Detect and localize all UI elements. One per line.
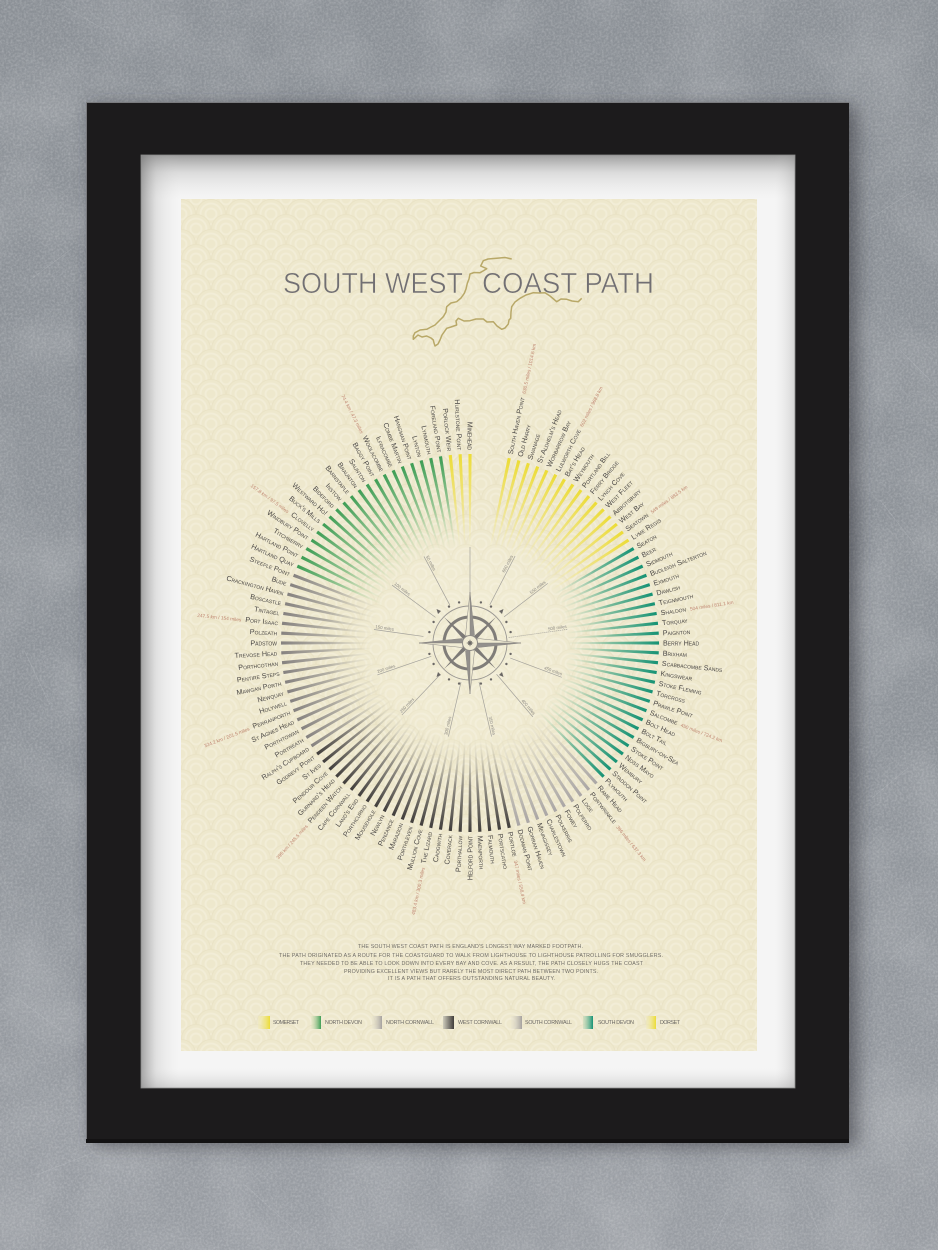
place names: Dorset: Worbarrow Bay [544,419,573,469]
place names: South Devon: Plymouth [603,776,630,803]
place names: Dorset: West Fleet [603,478,635,510]
bars: South Devon [537,547,659,778]
description paragraph: THEY NEEDED TO BE ABLE TO LOOK DOWN INTO EVERY BAY AND COVE. AS A RESULT, THE PATH CLOSELY HUGS THE COAST [300,961,644,967]
place names: North Cornwall: St Agnes Head [250,717,296,744]
place names: South Devon: Sidmouth [644,549,674,569]
place names: Dorset: Ferry Bridge [588,458,621,496]
compass dots [428,601,512,685]
place names: North Cornwall: Boscastle [249,592,283,607]
place names: West Cornwall: Maenporth [476,835,486,870]
place names: North Cornwall: 324.2 km / 201.5 milesPerranporth [202,708,292,749]
place names: West Cornwall: Cadgwith [431,833,444,863]
place names: Somerset: Porlock Weir [441,408,454,452]
place names: Dorset: Abbotsbury [610,486,643,517]
place names: West Cornwall: St Ives [300,761,323,782]
bars: North Devon [297,456,457,605]
mileage spokes: 300 miles [443,715,453,735]
place names: North Cornwall: Padstow [250,638,277,648]
legend: North Cornwall [372,1016,434,1029]
place names: Dorset: West Bay [617,499,646,525]
place names: Dorset [506,343,689,542]
place names: South Devon: Bolt Head [644,717,677,739]
place names: Dorset: Swanage [525,432,542,461]
radial chart of coast path places [197,343,734,915]
description paragraph: PROVIDING EXCELLENT VIEWS BUT RARELY THE MOST DIRECT PATH BETWEEN TWO POINTS. [344,969,598,975]
mileage spokes: 100 miles [393,581,412,597]
region: North Cornwall [197,554,390,782]
place names: West Cornwall: Coverack [442,834,454,865]
place names: South Devon: Seaton [635,532,658,550]
place names: South Cornwall: Fowey [563,808,581,830]
place names: North Devon: Titchberry [272,526,306,551]
title: COAST PATH [482,268,654,300]
title [283,268,654,300]
place names: North Cornwall: Bude [270,574,288,588]
mileage spokes: 400 miles [520,698,537,716]
place names: Dorset: Bat's Head [563,445,587,478]
place names: North Devon: Lynton [410,435,424,458]
place names: South Devon: Bigbury-on-Sea [635,736,681,768]
place names: North Cornwall: Trevose Head [234,649,278,660]
legend: Somerset: SOMERSET [273,1020,300,1026]
place names: South Cornwall: Dodman Point [516,828,535,872]
mileage spokes: 550 miles [529,579,547,595]
legend: Somerset [258,1016,300,1029]
place names: Dorset: St Aldhelm's Head [535,408,564,464]
mileage spokes: 600 miles [501,554,515,573]
region: West Cornwall [273,698,530,915]
legend: North Devon: NORTH DEVON [325,1020,362,1026]
place names: North Devon: Buck's Mills [287,494,323,525]
mileage spokes: 450 miles [543,665,564,677]
map: coast path outline [413,258,582,346]
description paragraph: THE PATH ORIGINATED AS A ROUTE FOR THE COASTGUARD TO WALK FROM LIGHTHOUSE TO LIGHTHOUSE PATROLLING FOR SMUGGLERS. [279,953,663,959]
place names: North Devon: Hartland Point [254,530,300,559]
legend: Dorset: DORSET [660,1020,681,1026]
mileage spokes: 200 miles [376,663,397,674]
place names: South Devon: Staddon Point [610,769,649,805]
place names: North Cornwall: Pentire Steps [236,669,281,684]
place names: Dorset: Old Harry [516,423,533,458]
place names: North Devon: Hartland Quay [250,542,296,569]
place names: Somerset: Hurlstone Point [453,399,464,451]
white mat [141,155,795,1088]
place names: North Devon: Saunton [347,457,369,484]
compass diagonal points [442,615,498,671]
mileage spokes: 500 miles [548,624,568,631]
place names: North Devon: Braunton [336,460,360,490]
legend: North Devon [311,1016,362,1029]
place names: South Devon: Salcombe450 miles / 724.2 km [649,708,724,744]
place names: West Cornwall: 483.4 km / 300.3 milesThe Lizard [408,830,434,915]
compass main points [419,592,521,694]
place names: West Cornwall: Land's End [333,796,360,829]
place names: North Devon: 157.8 km / 97.5 milesClovelly [249,481,317,534]
centre glow [350,523,590,763]
place names: South Devon [603,532,734,805]
place names: West Cornwall: Newlyn [368,813,387,837]
compass rings [433,606,507,680]
place names: North Cornwall: 247.5 km / 154 miles Port Isaac [197,610,279,627]
place names: North Cornwall: Crackington Haven [226,573,285,597]
place names: South Cornwall [516,783,649,872]
place names: North Devon: Hangman Point [392,414,415,461]
place names: North Devon: Bideford [311,484,337,510]
place names: West Cornwall: Mullion Cove [405,828,425,871]
place names: South Cornwall: Rame Head [596,783,625,815]
place names: North Cornwall: Holywell [258,698,288,716]
mileage spokes: 150 miles [375,624,395,632]
place names: South Cornwall: Charlestown [544,817,569,858]
place names: South Devon: Prawle Point [652,698,694,720]
place names: South Devon: Exmouth [652,571,680,588]
place names: North Devon: Foreland Point [428,405,444,453]
frame drop shadow [92,106,857,1146]
place names: South Devon: Wembury [617,761,645,786]
place names: South Cornwall: Gorran Haven [525,825,548,870]
place names: North Devon: Westward Ho! [290,481,330,517]
region: Somerset [441,399,474,548]
place names: North Cornwall: Porthtowan [263,726,300,752]
poster with scale pattern [181,199,757,1051]
legend: South Cornwall: SOUTH CORNWALL [525,1020,572,1026]
legend: West Cornwall: WEST CORNWALL [458,1020,502,1026]
place names: South Devon: Paignton [662,627,691,637]
place names: South Devon: Beer [640,544,658,559]
region: North Devon [249,392,457,605]
place names: South Devon: Dawlish [655,582,681,597]
legend: South Devon: SOUTH DEVON [598,1020,634,1026]
place names: South Devon: Brixham [662,649,687,659]
place names: West Cornwall: Helford Point [466,836,474,880]
legend: Dorset [646,1016,681,1029]
place names: West Cornwall: Falmouth [486,834,498,864]
description paragraph [279,944,663,982]
place names: West Cornwall: Penzance [376,817,396,847]
place names: Dorset: Portland Bill [580,450,612,490]
bars: South Cornwall [493,713,598,826]
place names: North Cornwall: Mawgan Porth [236,679,283,697]
place names: South Devon: Kingswear [660,669,693,683]
place names: West Cornwall: Porthcurno [341,802,369,839]
mileage spokes: 50 miles [425,555,437,572]
compass rose [419,592,521,694]
mileage spokes: 350 miles [488,716,497,736]
compass hub [462,636,478,650]
place names: North Cornwall: Porthcothan [238,659,279,672]
place names: North Cornwall: Polzeath [250,627,278,637]
place names: West Cornwall: Cape Cornwall [316,790,352,832]
legend: South Cornwall [511,1016,572,1029]
place names: North Devon: Combe Martin [381,421,405,465]
place names: West Cornwall: Porthleven [395,825,415,861]
bars: West Cornwall [316,698,511,832]
mileage spokes: 250 miles [399,696,416,714]
place names: Dorset: Weymouth [571,452,596,484]
place names: South Cornwall: Mevagissey [535,822,556,857]
place names: South Devon: Scabbacombe Sands [661,659,724,674]
place names: North Cornwall: Portreath [273,735,305,759]
place names: North Cornwall [197,554,311,782]
region: Dorset [488,343,689,592]
legend [258,1016,681,1029]
region: South Cornwall [493,713,649,872]
region: South Devon [537,532,734,805]
place names: West Cornwall: Porthallow [454,835,464,872]
place names: South Cornwall: Polperro [571,802,595,832]
place names: South Devon: Torcross [655,689,687,705]
black picture frame [86,102,849,1143]
bars: Dorset [488,458,629,592]
place names: Somerset [441,399,474,452]
place names: West Cornwall: 395 km / 245.5 milesPendeen Watch [273,783,344,861]
place names: West Cornwall: Mousehole [353,807,378,842]
place names: West Cornwall: Portscatho [496,833,510,870]
place names: South Devon: Stoke Point [629,744,665,772]
place names: South Devon: Shaldon 504 miles / 811.1 km [660,597,734,617]
place names: South Devon: Budleigh Salterton [649,548,708,578]
place names: Dorset: Lulworth Cove602 miles / 968.8 km [554,385,605,473]
place names: North Cornwall: Newquay [256,688,285,704]
place names: Somerset: Minehead [466,422,474,450]
place names: North Devon [249,392,444,569]
place names: Dorset: South Haven Point630.5 miles / 1014.6 km [506,343,538,455]
place names: West Cornwall: Godrevy Point [274,753,317,787]
place names: South Cornwall: Portwrinkle 396 miles / 637.3 km [588,790,649,863]
place names: North Devon: Barnstaple [324,464,352,496]
legend: North Cornwall: NORTH CORNWALL [386,1020,434,1026]
place names: Dorset: Seatown549 miles / 883.5 km [623,482,689,533]
place names: West Cornwall: Marazion [387,821,405,851]
place names: South Cornwall: Looe [580,796,596,815]
place names: North Devon: Ilfracombe [374,435,396,469]
description paragraph: THE SOUTH WEST COAST PATH IS ENGLAND'S LONGEST WAY MARKED FOOTPATH. [358,944,583,950]
place names: North Cornwall: Ralph's Cupboard [260,744,311,782]
description paragraph: IT IS A PATH THAT OFFERS OUTSTANDING NATURAL BEAUTY. [388,976,555,982]
legend: South Devon [583,1016,634,1029]
place names: South Cornwall: Polkerris [554,813,576,844]
place names: North Devon: Instow [324,481,344,503]
place names: North Devon: Lynmouth [419,425,434,456]
place names: North Cornwall: Steeple Point [248,554,291,578]
place names: Dorset: Lynch Cove [596,469,627,503]
place names: West Cornwall: Portloe 347 miles / 558.4 km [506,831,530,905]
place names: West Cornwall: Pendour Cove [291,768,330,805]
place names: North Devon: Windbury Point [265,508,311,542]
place names: North Devon: Baggy Point [351,441,377,478]
place names: West Cornwall [273,753,530,915]
bars: Somerset [449,454,472,548]
place names: South Devon: Torquay [661,616,689,627]
place names: South Devon: Stoke Fleming [658,679,703,697]
legend: West Cornwall [443,1016,502,1029]
place names: North Cornwall: Tintagel [254,604,280,617]
place names: West Cornwall: Gurnard's Head [296,776,337,817]
place names: South Devon: Teignmouth [658,591,694,607]
bars: North Cornwall [281,574,390,747]
place names: North Devon: 74.4 km / 47.3 miles Woolacombe [339,392,387,474]
place names: South Devon: Noss Mayo [623,753,656,780]
place names: South Devon: Berry Head [663,638,699,648]
place names: South Devon: Bolt Tail [640,727,669,747]
place names: Dorset: Lyme Regis [629,515,663,542]
title: SOUTH WEST [283,268,463,300]
mileage spokes [374,547,568,737]
